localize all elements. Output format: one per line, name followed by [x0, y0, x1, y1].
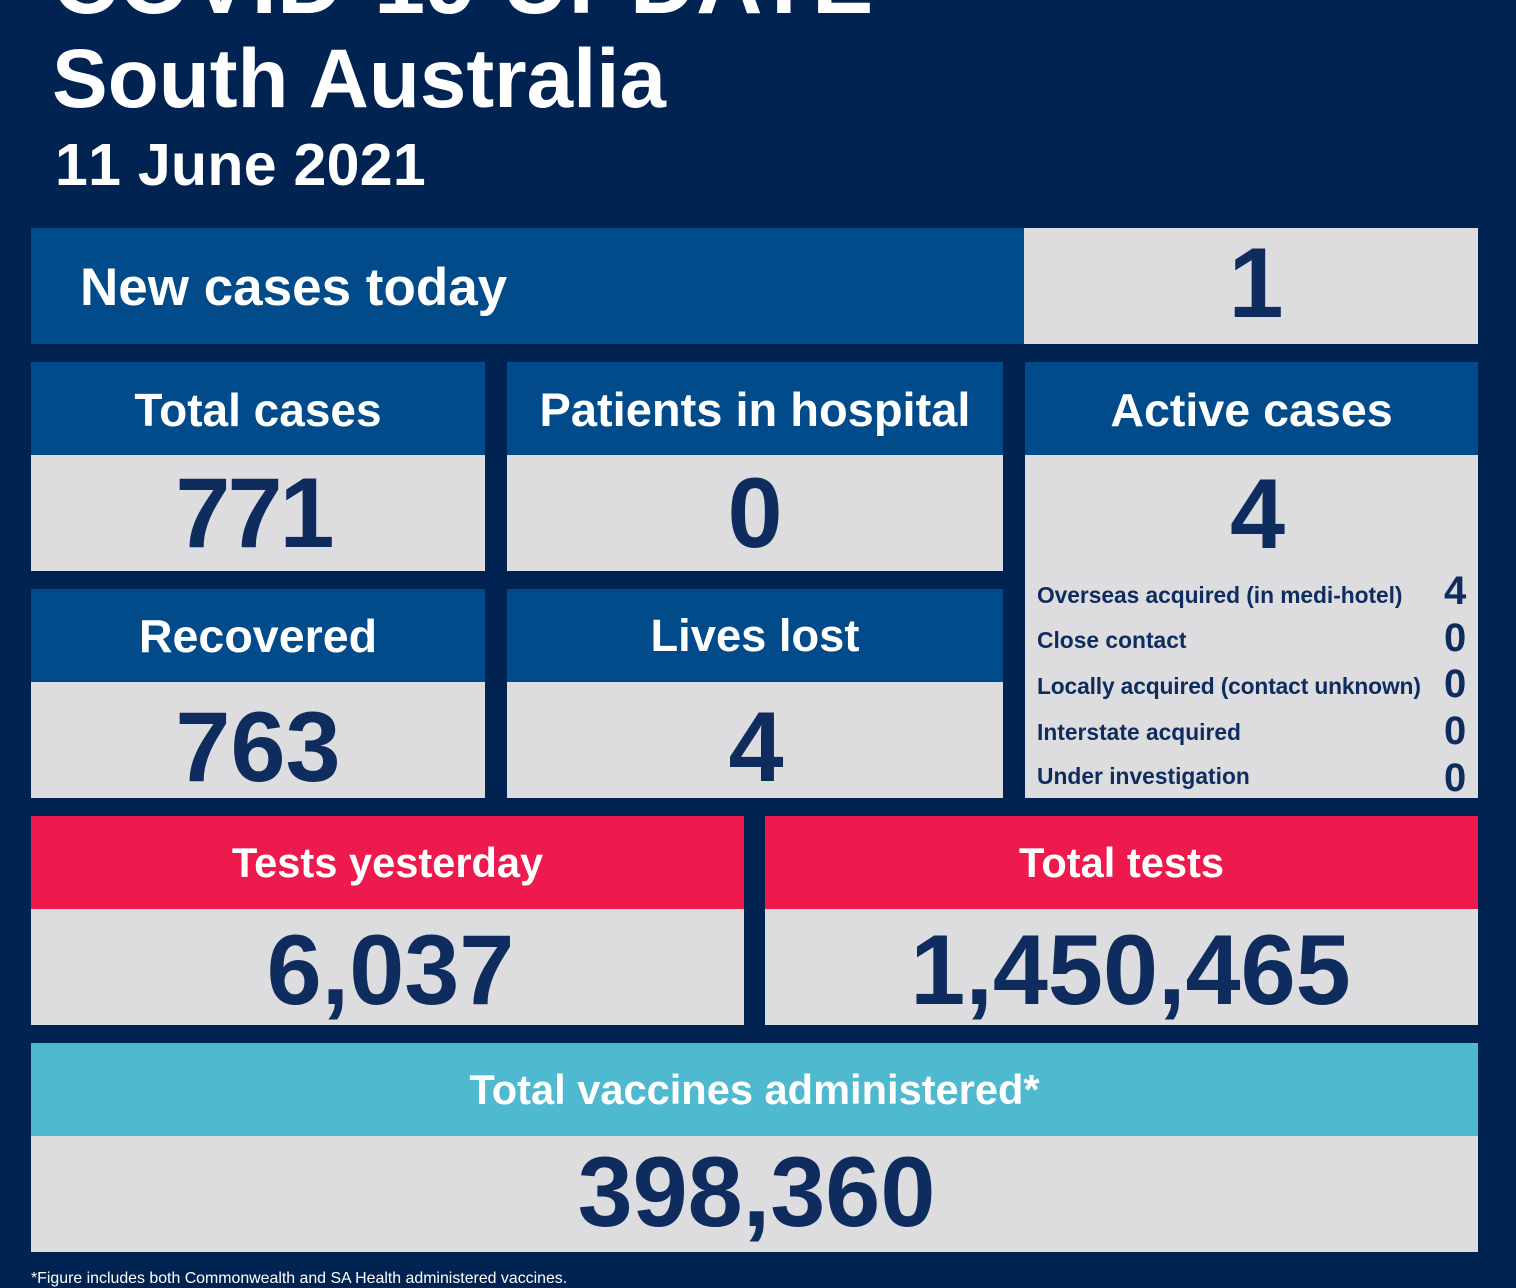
breakdown: close contact: Close contact	[1037, 627, 1186, 653]
lives lost value: 4	[728, 691, 784, 802]
new cases value	[1024, 228, 1478, 344]
count: locally acquired: 0	[1444, 662, 1466, 706]
recovered value: 763	[175, 691, 341, 802]
panel: total cases	[31, 362, 485, 571]
panel: recovered	[31, 589, 485, 802]
tests yesterday heading	[31, 816, 744, 909]
panel: tests yesterday	[31, 816, 744, 1025]
vaccines value: 398,360	[578, 1136, 935, 1247]
patients value: 0	[727, 457, 783, 568]
count: under investigation: 0	[1444, 756, 1466, 800]
vaccines value	[31, 1136, 1478, 1252]
active cases heading	[1025, 362, 1478, 455]
recovered value	[31, 682, 485, 798]
date: 11 June 2021	[55, 132, 426, 198]
panel: active cases	[1025, 362, 1478, 800]
lives lost value	[507, 682, 1003, 798]
recovered heading	[31, 589, 485, 682]
active cases body	[1025, 455, 1478, 798]
total cases heading: Total cases	[134, 384, 382, 436]
breakdown: interstate acquired: Interstate acquired	[1037, 719, 1241, 745]
panel: patients in hospital	[507, 362, 1003, 571]
vaccines heading	[31, 1043, 1478, 1136]
new cases value: 1	[1228, 227, 1284, 338]
lives lost heading	[507, 589, 1003, 682]
breakdown: locally acquired: Locally acquired (contact unknown)	[1037, 673, 1421, 699]
total cases value: 771	[175, 457, 332, 568]
patients value	[507, 455, 1003, 571]
total tests value	[765, 909, 1478, 1025]
tests yesterday value	[31, 909, 744, 1025]
subtitle: South Australia: South Australia	[52, 31, 666, 125]
patients heading: Patients in hospital	[540, 383, 970, 436]
panel: lives lost	[507, 589, 1003, 802]
new cases label: New cases today	[80, 258, 507, 317]
lives lost heading: Lives lost	[651, 610, 859, 661]
total tests heading: Total tests	[1019, 839, 1224, 886]
total tests heading	[765, 816, 1478, 909]
breakdown: under investigation: Under investigation	[1037, 763, 1250, 789]
panel: new cases today	[31, 227, 1478, 344]
count: close contact: 0	[1444, 616, 1466, 660]
total cases heading	[31, 362, 485, 455]
tests yesterday heading: Tests yesterday	[232, 839, 543, 886]
recovered heading: Recovered	[139, 610, 377, 662]
total cases value	[31, 455, 485, 571]
patients heading	[507, 362, 1003, 455]
count: interstate acquired: 0	[1444, 709, 1466, 753]
count: overseas acquired: 4	[1444, 569, 1466, 613]
active cases heading: Active cases	[1110, 384, 1393, 436]
new cases label	[31, 228, 1024, 344]
vaccines heading: Total vaccines administered*	[469, 1066, 1040, 1113]
tests yesterday value: 6,037	[267, 914, 514, 1025]
footnote: *Figure includes both Commonwealth and SA Health administered vaccines.	[31, 1270, 567, 1287]
panel: total tests	[765, 816, 1478, 1025]
panel: total vaccines	[31, 1043, 1478, 1252]
total tests value: 1,450,465	[910, 914, 1351, 1025]
active cases value: 4	[1230, 458, 1285, 569]
breakdown: overseas acquired: Overseas acquired (in medi-hotel)	[1037, 582, 1402, 608]
